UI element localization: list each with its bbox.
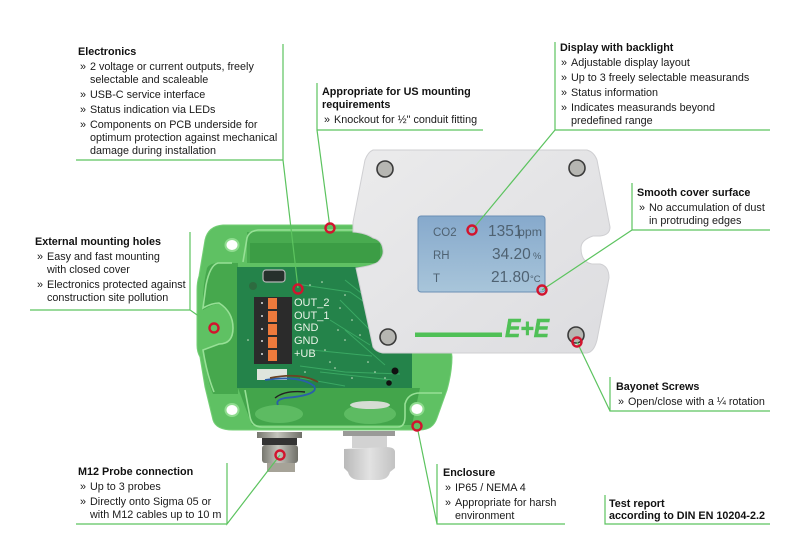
terminal labels: GND: [294, 335, 318, 347]
display: 21.80: [491, 269, 530, 286]
panel: bayonet screws: »: [618, 396, 624, 408]
panel: display with backlight: [472, 42, 770, 230]
panel: display with backlight: »: [561, 87, 567, 99]
panel: enclosure: IP65 / NEMA 4: [455, 482, 526, 494]
panel: electronics: »: [80, 104, 86, 116]
panel: external mounting holes: External mounting holes: [35, 236, 161, 248]
panel: external mounting holes: [30, 232, 200, 317]
panel: display with backlight: predefined range: [571, 115, 653, 127]
panel: smooth cover surface: in protruding edges: [649, 215, 742, 227]
panel: US mounting: Knockout for ½" conduit fitting: [334, 114, 477, 126]
panel: US mounting: requirements: [322, 99, 390, 111]
display: RH: [433, 250, 450, 262]
panel: electronics: »: [80, 119, 86, 131]
connector and wires: [257, 369, 318, 405]
panel: electronics: [76, 44, 298, 288]
panel: smooth cover surface: [542, 183, 770, 290]
panel: electronics: optimum protection against mechanical: [90, 132, 277, 144]
USB-C port: [263, 270, 285, 282]
panel: electronics: 2 voltage or current outputs, freely: [90, 61, 254, 73]
panel: test report: [605, 495, 770, 524]
panel: test report: according to DIN EN 10204-2.2: [609, 510, 765, 522]
panel: electronics: selectable and scaleable: [90, 74, 208, 86]
panel: M12 probe connection: [76, 455, 280, 524]
panel: enclosure: [417, 426, 565, 524]
panel: bayonet screws: Open/close with a ¼ rotation: [628, 396, 765, 408]
panel: external mounting holes: construction site pollution: [47, 292, 168, 304]
panel: electronics: »: [80, 61, 86, 73]
panel: test report: Test report: [609, 498, 665, 510]
terminal block: [254, 297, 292, 364]
panel: bayonet screws: [577, 342, 770, 411]
panel: external mounting holes: »: [37, 279, 43, 291]
panel: US mounting: [317, 83, 483, 228]
terminal labels: OUT_1: [294, 310, 329, 322]
terminal labels: [294, 297, 329, 360]
M12 connector: [257, 432, 302, 472]
display: CO2: [433, 227, 457, 239]
panel: enclosure: Appropriate for harsh: [455, 497, 556, 509]
panel: external mounting holes: with closed cover: [46, 264, 130, 276]
panel: display with backlight: Adjustable display layout: [571, 57, 690, 69]
cover: [353, 150, 610, 353]
panel: smooth cover surface: »: [639, 202, 645, 214]
display: 34.20: [492, 246, 531, 263]
panel: display with backlight: Indicates measurands beyond: [571, 102, 715, 114]
cable gland: [343, 431, 395, 480]
panel: enclosure: »: [445, 497, 451, 509]
panel: M12 probe connection: Directly onto Sigma 05 or: [90, 496, 212, 508]
display: 1351: [488, 223, 522, 240]
display: ppm: [518, 227, 542, 239]
terminal labels: OUT_2: [294, 297, 329, 309]
panel: US mounting: Appropriate for US mounting: [322, 86, 471, 98]
panel: M12 probe connection: »: [80, 496, 86, 508]
panel: display with backlight: Display with backlight: [560, 42, 674, 54]
panel: display with backlight: Up to 3 freely selectable measurands: [571, 72, 750, 84]
panel: electronics: Components on PCB underside for: [90, 119, 258, 131]
panel: M12 probe connection: Up to 3 probes: [90, 481, 161, 493]
display: °C: [530, 274, 541, 285]
panel: smooth cover surface: No accumulation of dust: [649, 202, 765, 214]
enclosure base: [197, 225, 452, 430]
cable gland sockets: [255, 401, 396, 424]
screws: [377, 160, 585, 345]
panel: electronics: Status indication via LEDs: [90, 104, 216, 116]
panel: enclosure: environment: [455, 510, 514, 522]
E+E logo: [415, 313, 550, 343]
panel: external mounting holes: Electronics protected against: [47, 279, 186, 291]
panel: US mounting: »: [324, 114, 330, 126]
panel: display with backlight: »: [561, 102, 567, 114]
panel: display with backlight: »: [561, 57, 567, 69]
panel: electronics: Electronics: [78, 46, 136, 58]
panel: enclosure: »: [445, 482, 451, 494]
panel: M12 probe connection: M12 Probe connection: [78, 466, 193, 478]
panel: bayonet screws: Bayonet Screws: [616, 381, 699, 393]
display: %: [533, 251, 542, 262]
display: [418, 216, 545, 292]
panel: smooth cover surface: Smooth cover surface: [637, 187, 750, 199]
E+E logo: E+E: [505, 313, 550, 343]
panel: display with backlight: Status information: [571, 87, 658, 99]
panel: electronics: USB-C service interface: [90, 89, 205, 101]
mounting holes: [226, 239, 424, 416]
terminal labels: +UB: [294, 348, 316, 360]
callout markers: [210, 224, 582, 460]
panel: external mounting holes: »: [37, 251, 43, 263]
panel: enclosure: Enclosure: [443, 467, 495, 479]
circuit board: [237, 267, 412, 405]
panel: M12 probe connection: with M12 cables up to 10 m: [89, 509, 221, 521]
panel: electronics: damage during installation: [90, 145, 216, 157]
display: T: [433, 273, 440, 285]
panel: electronics: »: [80, 89, 86, 101]
terminal labels: GND: [294, 322, 318, 334]
panel: display with backlight: »: [561, 72, 567, 84]
panel: external mounting holes: Easy and fast mounting: [47, 251, 160, 263]
panel: M12 probe connection: »: [80, 481, 86, 493]
